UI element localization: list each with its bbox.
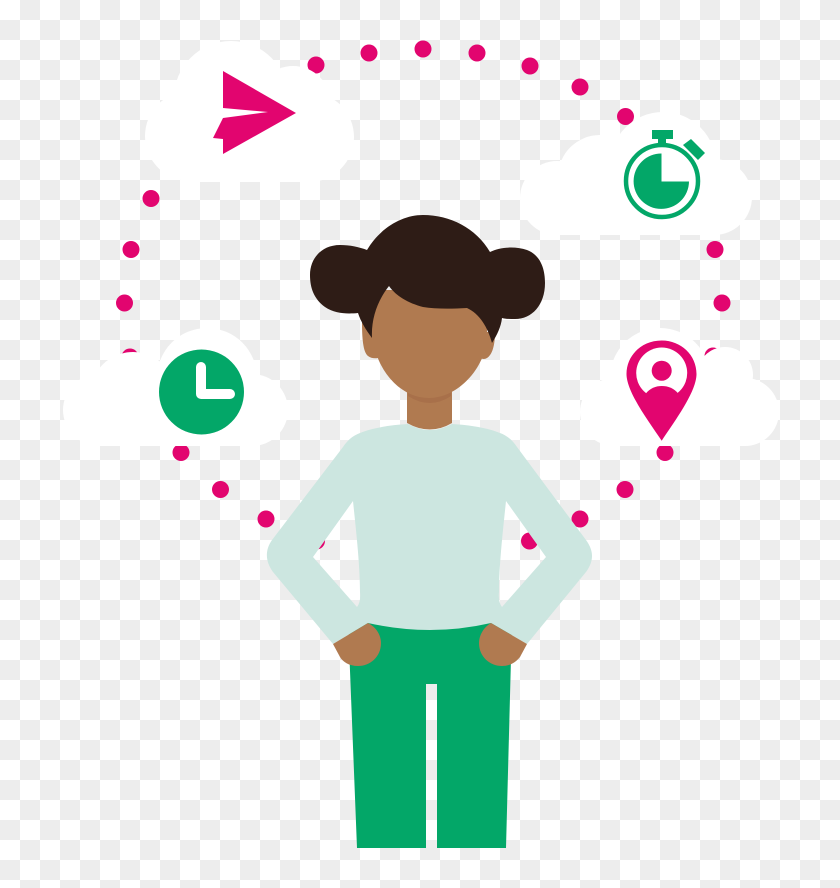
neck [407,385,452,430]
cloud: stopwatch [520,112,752,235]
icon: stopwatch [626,130,705,217]
ears [362,322,495,359]
neck shadow [408,392,451,403]
cloud: clock [63,328,288,446]
right hand [479,623,527,666]
cloud: location pin [580,328,779,446]
left hand [333,623,381,666]
icon: location pin [626,340,696,441]
face [373,290,487,398]
person [267,215,592,848]
sweater [267,424,592,644]
icon: clock [159,350,244,434]
trousers [348,620,512,848]
hair [310,215,545,343]
cloud: paper plane [145,41,354,182]
dotted ring [116,40,730,550]
icon: paper plane [213,71,296,154]
